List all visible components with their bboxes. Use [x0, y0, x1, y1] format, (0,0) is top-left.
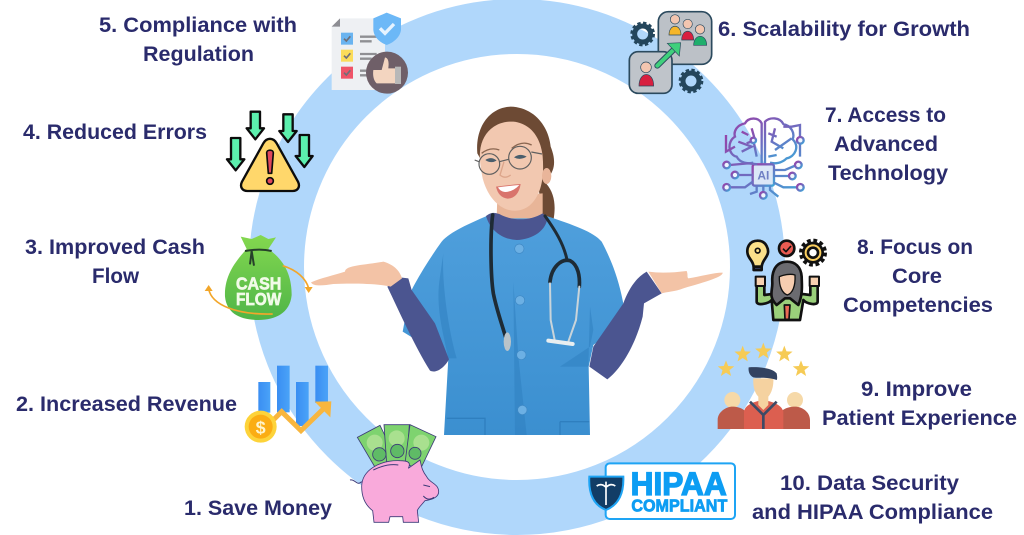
label: 3. Improved Cash Flow [25, 236, 205, 288]
right hand [648, 271, 723, 293]
label: 7. Access to Advanced Technology: Technology [828, 162, 948, 185]
label: 5. Compliance with Regulation: Regulation [143, 43, 254, 66]
icon: patient experience with stars [718, 343, 810, 429]
eyes [485, 155, 527, 162]
icon: woman focused on core competencies [747, 241, 825, 320]
note details [367, 430, 429, 451]
right sleeve [589, 272, 662, 379]
checklist lines [360, 37, 377, 75]
light bulb [747, 241, 768, 267]
bag label: FLOW [236, 289, 282, 309]
left sleeve [387, 277, 449, 371]
badge text: COMPLIANT [631, 495, 727, 515]
downward arrows [227, 112, 313, 170]
buttons [515, 244, 527, 415]
check marks [344, 36, 350, 75]
bag label [236, 273, 282, 309]
circuit nodes [723, 137, 804, 199]
eyebrows [482, 143, 532, 153]
team people [639, 15, 707, 86]
gear teeth [801, 241, 825, 265]
rising arrow [272, 408, 324, 431]
nose [500, 162, 511, 177]
label: 7. Access to Advanced Technology: 7. Access to [825, 104, 946, 127]
side patients [724, 392, 740, 408]
bag tie [245, 250, 272, 266]
scrub shading [438, 253, 593, 435]
exclamation mark [267, 150, 273, 173]
icon: HIPAA compliant badge [589, 463, 735, 519]
label: 8. Focus on Core Competencies: Core [892, 265, 942, 288]
icon: increased revenue chart [245, 366, 331, 443]
label: 8. Focus on Core Competencies: 8. Focus on [857, 236, 973, 259]
bag [225, 235, 292, 320]
label: 2. Increased Revenue: 2. Increased Revenue [16, 393, 237, 416]
icon: piggy bank with bills [350, 425, 439, 522]
thumbs up badge [366, 52, 408, 94]
face [480, 122, 543, 211]
label: 10. Data Security and HIPAA Compliance: 10. Data Security [780, 472, 959, 495]
brain outline [730, 118, 796, 163]
single person block [629, 52, 672, 93]
label: 10. Data Security and HIPAA Compliance: and HIPAA Compliance [752, 501, 993, 524]
label: 7. Access to Advanced Technology: Advanced [834, 133, 938, 156]
label: 9. Improve Patient Experience [822, 378, 1017, 430]
label: 10. Data Security and HIPAA Compliance [752, 472, 993, 524]
mouth [496, 184, 521, 199]
label: 7. Access to Advanced Technology [825, 104, 948, 185]
stethoscope [491, 215, 579, 344]
hair [771, 262, 802, 305]
AI chip [753, 164, 774, 186]
bars [258, 366, 328, 426]
glasses [475, 146, 542, 174]
label: 8. Focus on Core Competencies: Competencies [843, 294, 993, 317]
icon: warning triangle with arrows [227, 112, 313, 191]
hair [749, 367, 777, 380]
ring background [276, 26, 758, 508]
document [332, 18, 385, 90]
hair and ponytail [477, 107, 555, 221]
fists [756, 277, 819, 286]
tie [784, 305, 790, 319]
shield [589, 477, 623, 510]
chest piece [504, 332, 511, 351]
left hand [311, 262, 402, 287]
label: 5. Compliance with Regulation [99, 14, 297, 66]
gears [632, 23, 702, 92]
label: 9. Improve Patient Experience: 9. Improve [861, 378, 972, 401]
bank notes [357, 425, 436, 470]
scrub top [403, 216, 623, 435]
label: 3. Improved Cash Flow: 3. Improved Cash [25, 236, 205, 259]
tail and face [350, 465, 434, 499]
label: 3. Improved Cash Flow: Flow [92, 265, 140, 288]
collar [486, 213, 547, 240]
central patient [744, 400, 783, 429]
ear [542, 168, 551, 184]
badge text: HIPAA [631, 466, 727, 502]
arms and jacket [757, 285, 818, 320]
circular arrows [209, 266, 309, 314]
central figure: nurse with stethoscope [311, 107, 723, 435]
dollar coin [245, 411, 277, 443]
bag label: CASH [236, 273, 281, 293]
shield [373, 13, 401, 45]
label: 6. Scalability for Growth: 6. Scalability for Growth [718, 18, 970, 41]
icon: compliance checklist with shield and thumbs up [332, 13, 408, 94]
caduceus [597, 482, 615, 505]
warning triangle [241, 139, 299, 191]
face [779, 274, 795, 295]
gear body [803, 243, 823, 262]
badge frame [606, 463, 735, 519]
icon: increased revenue chart: $ [256, 417, 266, 437]
icon: AI brain circuit [723, 118, 804, 199]
icon: AI brain circuit: AI [757, 168, 769, 182]
team block [658, 12, 712, 64]
rating stars [718, 343, 809, 376]
icon: scalability team blocks [629, 12, 712, 93]
label: 5. Compliance with Regulation: 5. Compliance with [99, 14, 297, 37]
label: 1. Save Money: 1. Save Money [184, 497, 332, 520]
label: 4. Reduced Errors: 4. Reduced Errors [23, 121, 207, 144]
pockets [447, 418, 589, 435]
checkboxes [341, 33, 353, 79]
label: 8. Focus on Core Competencies [843, 236, 993, 317]
circuit traces [726, 125, 800, 197]
neck [497, 193, 543, 218]
pig body [362, 460, 439, 522]
label: 9. Improve Patient Experience: Patient Experience [822, 407, 1017, 430]
brain folds [738, 128, 792, 157]
check badge [779, 241, 794, 256]
growth arrow [657, 48, 675, 66]
icon: cash flow money bag [205, 235, 313, 320]
